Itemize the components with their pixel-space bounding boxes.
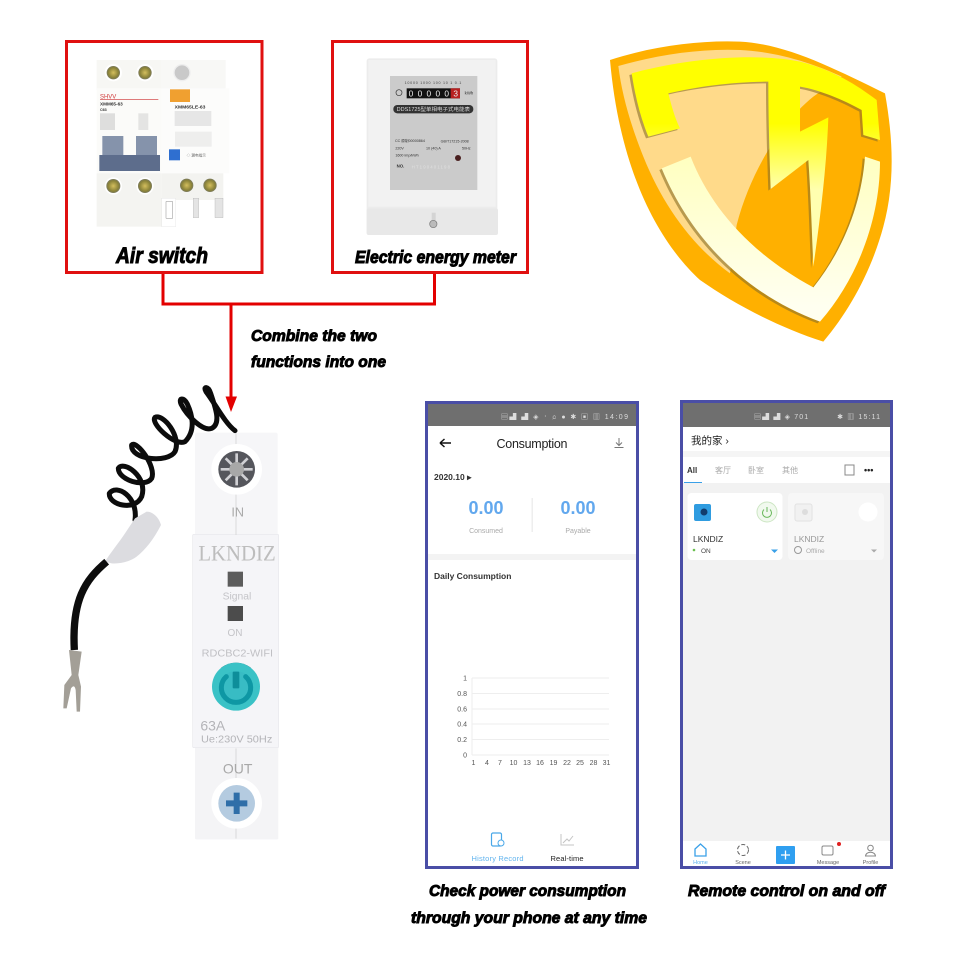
home title: 我的家 › (691, 434, 729, 447)
nav: scene (735, 844, 751, 866)
brand and indicators: ON (228, 628, 242, 639)
line chart: 0.2 (457, 737, 467, 744)
line chart: 10 (510, 760, 517, 767)
status bar (428, 404, 636, 426)
phone: consumption (426, 402, 638, 868)
brand and indicators: Signal (223, 592, 251, 603)
chart heading: Daily Consumption (434, 571, 511, 581)
meter photo: CC 原制00000864 (395, 138, 425, 143)
pale shield bottom (662, 157, 880, 322)
room tabs: 其他 (782, 465, 798, 475)
in terminal: IN (231, 506, 244, 520)
caption: check power consumption (411, 883, 647, 927)
line chart: 22 (563, 760, 571, 767)
breaker body (193, 433, 279, 839)
room tabs: 客厅 (715, 465, 731, 475)
card: offline device: Offline (806, 548, 825, 555)
power button (212, 663, 260, 711)
lead wire and fork (63, 562, 107, 712)
status bar: ▤▟ ▟ ◈ 701 ✱ ▥ 15:11 (754, 413, 880, 421)
air switch photo: ◇ 漏电指示 (187, 153, 206, 158)
line chart: 25 (576, 760, 584, 767)
line chart: 4 (485, 760, 489, 767)
line chart: 7 (498, 760, 502, 767)
stat: consumed: Consumed (469, 528, 503, 535)
status bar: ▤▟ ▟ ◈ ᛫ ⌕ ● ✱ ▣ ▥ 14:09 (501, 413, 628, 421)
lead wire (74, 562, 107, 650)
list background (683, 483, 890, 841)
meter photo: 1600 imp/kWh (395, 154, 419, 158)
coil wire and clip (105, 388, 235, 563)
room tabs: All (687, 466, 697, 475)
phone: device list (682, 402, 892, 868)
room tabs (684, 465, 873, 483)
stat: payable (560, 498, 596, 535)
tab: real-time: Real-time (550, 854, 584, 863)
line chart: 13 (523, 760, 531, 767)
rating text: 63A (200, 718, 226, 734)
fork terminal (63, 650, 82, 712)
rating text: Ue:230V 50Hz (201, 735, 273, 746)
status bar (683, 403, 890, 427)
nav: add (776, 846, 795, 864)
meter photo (367, 58, 498, 235)
card: offline device (788, 493, 884, 560)
meter photo: DDS1725型单相电子式电能表 (397, 105, 471, 113)
stat: consumed: 0.00 (468, 498, 504, 518)
yellow shield top and bolt (632, 57, 880, 267)
meter photo: 10 (40) A (426, 146, 441, 150)
in terminal (211, 444, 262, 520)
out terminal (211, 778, 262, 829)
line chart: 28 (590, 760, 597, 767)
air switch photo (97, 60, 229, 227)
rating text: OUT (223, 760, 253, 776)
connector lines (163, 273, 434, 304)
tab: real-time (550, 834, 584, 863)
nav: profile (863, 845, 878, 866)
nav: profile: Profile (863, 860, 878, 866)
card: online device: ON (701, 548, 711, 555)
line chart: 0.8 (457, 691, 467, 698)
air switch photo: XMM65LE-63 (175, 105, 206, 111)
meter photo: 10000 1000 100 10 1 0.1 (405, 81, 461, 85)
coil wire (109, 388, 235, 520)
stat: consumed (468, 498, 504, 535)
caption: remote control: Remote control on and off (688, 883, 887, 900)
caption: combine (251, 328, 386, 371)
line chart: 19 (550, 760, 557, 767)
room tabs: ••• (864, 465, 873, 475)
caption: check power consumption: Check power consumption (429, 883, 626, 900)
caption: combine: Combine the two (251, 328, 377, 345)
header: Consumption (496, 437, 568, 451)
icon: shield logo (610, 41, 892, 342)
nav: message: Message (817, 860, 839, 866)
meter photo: 220V (395, 146, 404, 150)
nav: home: Home (693, 860, 708, 866)
line chart: 31 (603, 760, 610, 767)
line chart: 1 (472, 760, 476, 767)
air switch photo: XMM65-63 (100, 101, 123, 106)
bottom navigation (683, 841, 890, 866)
label: electric energy meter: Electric energy meter (355, 247, 517, 267)
nav: home (693, 844, 708, 866)
tab: history record (472, 833, 524, 863)
air switch photo: SHVV (100, 95, 116, 101)
caption: combine: functions into one (251, 354, 386, 371)
line chart: 1 (463, 676, 467, 682)
stat: payable: Payable (565, 528, 591, 535)
device: wifi breaker (193, 433, 279, 839)
label: air switch: Air switch (115, 243, 208, 268)
air switch photo: C63 (100, 108, 107, 112)
meter photo: 000003 (409, 88, 458, 98)
line chart (457, 676, 610, 767)
brand and indicators: LKNDIZ (198, 540, 276, 565)
stat: payable: 0.00 (560, 498, 596, 518)
nav: message (817, 842, 841, 866)
line chart: 0.6 (457, 706, 467, 714)
meter photo: GB/T17215-2008 (441, 139, 469, 143)
line chart: 0 (463, 752, 467, 760)
header (440, 437, 624, 451)
meter photo: HT190401198 (412, 164, 451, 169)
line chart: 0.4 (457, 722, 467, 728)
clip (105, 512, 161, 563)
card: offline device: LKNDIZ (794, 534, 824, 544)
room tabs: 卧室 (748, 465, 764, 475)
meter photo: 50Hz (462, 146, 471, 150)
arrow: down to device (226, 304, 237, 412)
panel: electric energy meter (332, 42, 528, 272)
nav: scene: Scene (735, 860, 751, 866)
date: 2020.10 ▸ (434, 472, 472, 482)
tab: history record: History Record (472, 854, 524, 863)
meter photo: NO. (397, 164, 404, 169)
panel: air switch (66, 42, 262, 272)
line chart: 16 (536, 760, 544, 767)
meter photo: kWh (465, 91, 474, 96)
brand and indicators (198, 540, 276, 660)
caption: check power consumption: through your phone at any time (411, 910, 647, 927)
card: online device (688, 493, 782, 560)
rating text (200, 718, 273, 776)
brand and indicators: RDCBC2-WIFI (202, 649, 273, 660)
card: online device: LKNDIZ (693, 534, 723, 544)
